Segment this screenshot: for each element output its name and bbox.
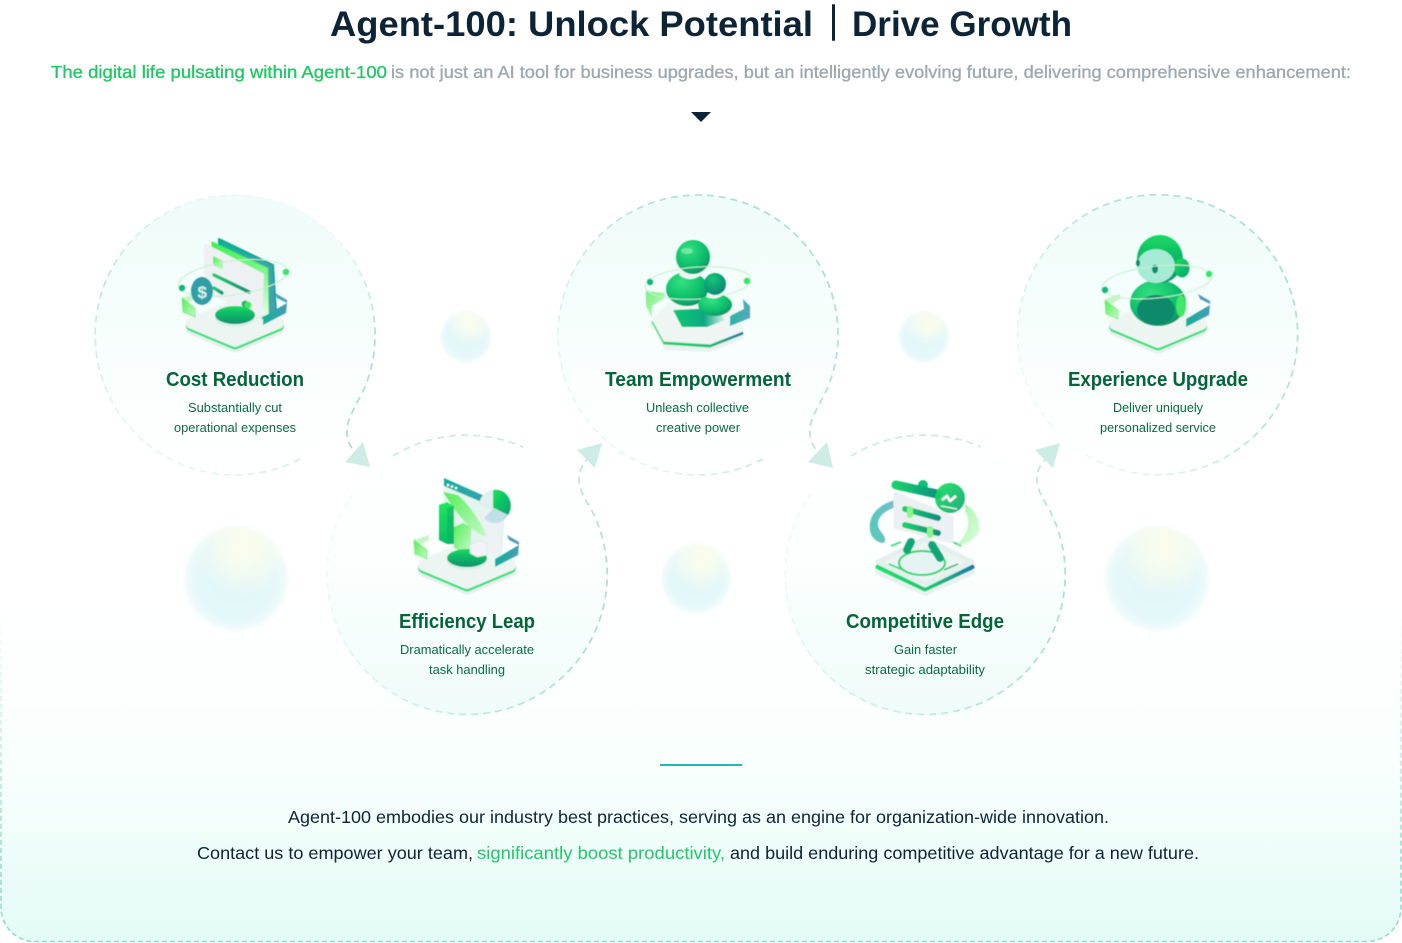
arrow 3	[808, 442, 833, 468]
heading: Experience Upgrade	[1068, 369, 1248, 391]
icon: cost reduction card and coin	[176, 239, 290, 347]
description: Deliver uniquely	[1113, 401, 1204, 415]
heading: Team Empowerment	[605, 369, 791, 391]
closing statement: and build enduring competitive advantage for a new future.	[730, 843, 1199, 863]
icon: cost reduction card and coin: $	[198, 283, 208, 302]
heading: Efficiency Leap	[399, 611, 535, 633]
description	[174, 401, 296, 435]
description: personalized service	[1100, 421, 1216, 435]
panel: team empowerment	[558, 195, 838, 475]
title: Drive Growth	[852, 4, 1072, 44]
description: Gain faster	[894, 643, 957, 657]
subtitle: The digital life pulsating within Agent-100	[51, 62, 387, 82]
closing statement: Contact us to empower your team,	[197, 843, 473, 863]
description: Unleash collective	[646, 401, 749, 415]
description: task handling	[429, 663, 505, 677]
closing statement	[197, 807, 1199, 863]
icon: competitive board	[870, 480, 979, 593]
panel: efficiency leap	[327, 435, 607, 715]
icon: efficiency chart	[414, 478, 519, 589]
arrow 4	[1035, 443, 1060, 468]
pointer triangle	[691, 112, 711, 122]
icon: team	[644, 240, 752, 351]
description	[646, 401, 749, 435]
icon: service agent	[1101, 235, 1213, 348]
closing statement: significantly boost productivity,	[477, 843, 725, 863]
description: creative power	[656, 421, 740, 435]
background panel	[1, 480, 1401, 942]
title	[330, 0, 1072, 47]
description	[1100, 401, 1216, 435]
description	[865, 643, 986, 677]
panel: cost reduction	[95, 195, 375, 475]
arrow 2	[577, 443, 602, 468]
description: Substantially cut	[188, 401, 282, 415]
panel: experience upgrade	[1018, 195, 1298, 475]
heading: Competitive Edge	[846, 611, 1004, 633]
description: operational expenses	[174, 421, 296, 435]
arrow 1	[345, 442, 370, 467]
description: strategic adaptability	[865, 663, 986, 677]
heading: Cost Reduction	[166, 369, 304, 391]
subtitle: is not just an AI tool for business upgrades, but an intelligently evolving future, delivering comprehensive enhancement:	[391, 62, 1351, 82]
description: Dramatically accelerate	[400, 643, 534, 657]
decorative spheres	[179, 309, 1214, 636]
panel: competitive edge	[785, 435, 1065, 715]
title: Agent-100: Unlock Potential	[330, 4, 813, 44]
description	[400, 643, 534, 677]
closing statement: Agent-100 embodies our industry best practices, serving as an engine for organization-wide innovation.	[288, 807, 1109, 827]
